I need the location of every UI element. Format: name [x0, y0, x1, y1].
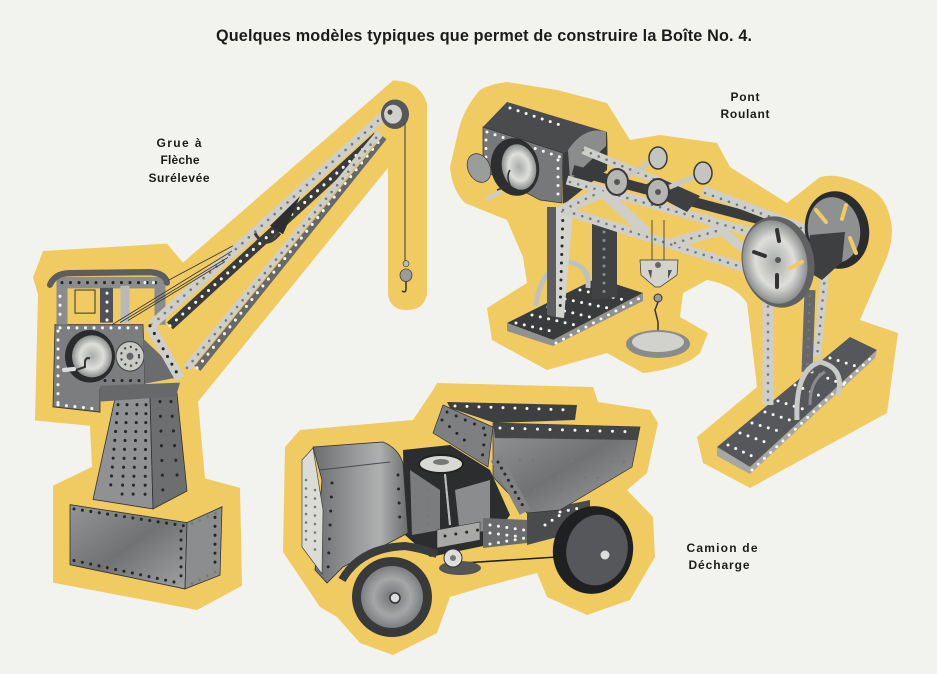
steering wheel	[419, 455, 463, 473]
big front pulley	[733, 210, 823, 314]
truck yellow cut-out background	[283, 383, 658, 655]
tipper body	[433, 402, 640, 513]
rear chassis plate	[483, 518, 530, 548]
crane label: Surélevée	[148, 171, 210, 185]
bridge crane model panel	[450, 82, 898, 488]
bridge crane label	[720, 90, 770, 121]
cab upper frame	[62, 283, 160, 325]
crane label: Grue à	[156, 136, 202, 150]
gear disc	[116, 342, 144, 371]
fender	[342, 546, 437, 580]
left base plate	[507, 262, 643, 346]
crane yellow cut-out background	[33, 81, 427, 610]
crane label	[148, 136, 210, 185]
right legs	[768, 273, 840, 420]
end housing	[805, 232, 845, 280]
motor housing	[143, 338, 178, 384]
drive belt and pulley	[439, 549, 557, 575]
bridge crane label: Pont	[730, 90, 760, 104]
trolley box	[463, 102, 608, 205]
rear wheel	[799, 186, 875, 274]
hoist cord and hook	[400, 123, 412, 292]
bridge yellow cut-out background	[450, 82, 898, 488]
engine hood	[302, 442, 408, 583]
left legs	[547, 207, 617, 318]
front wheel	[352, 557, 432, 637]
truck label: Camion de	[686, 541, 758, 555]
crane label: Flèche	[160, 153, 200, 167]
bridge crane label: Roulant	[720, 107, 770, 121]
trolley wheels on beam	[606, 147, 712, 212]
hoist block and dish	[626, 220, 690, 358]
hanging dish	[626, 330, 690, 358]
truck label: Décharge	[688, 558, 750, 572]
gantry beam	[562, 150, 820, 268]
crane cab	[50, 272, 180, 412]
boom strings	[112, 246, 233, 325]
drum and crank	[485, 134, 545, 200]
beam cross braces	[562, 192, 603, 210]
crane boom	[112, 99, 409, 378]
rear wheel	[545, 499, 641, 601]
crane tower	[93, 393, 187, 509]
title: Quelques modèles typiques que permet de construire la Boîte No. 4.	[216, 27, 752, 45]
chassis and machinery	[403, 445, 590, 557]
crane model panel	[33, 81, 427, 610]
right base plate	[717, 337, 877, 474]
winding drum	[65, 330, 115, 383]
top pulley	[381, 99, 409, 129]
dump truck model panel	[283, 383, 658, 655]
truck label	[686, 541, 758, 572]
crane base block	[70, 505, 222, 589]
